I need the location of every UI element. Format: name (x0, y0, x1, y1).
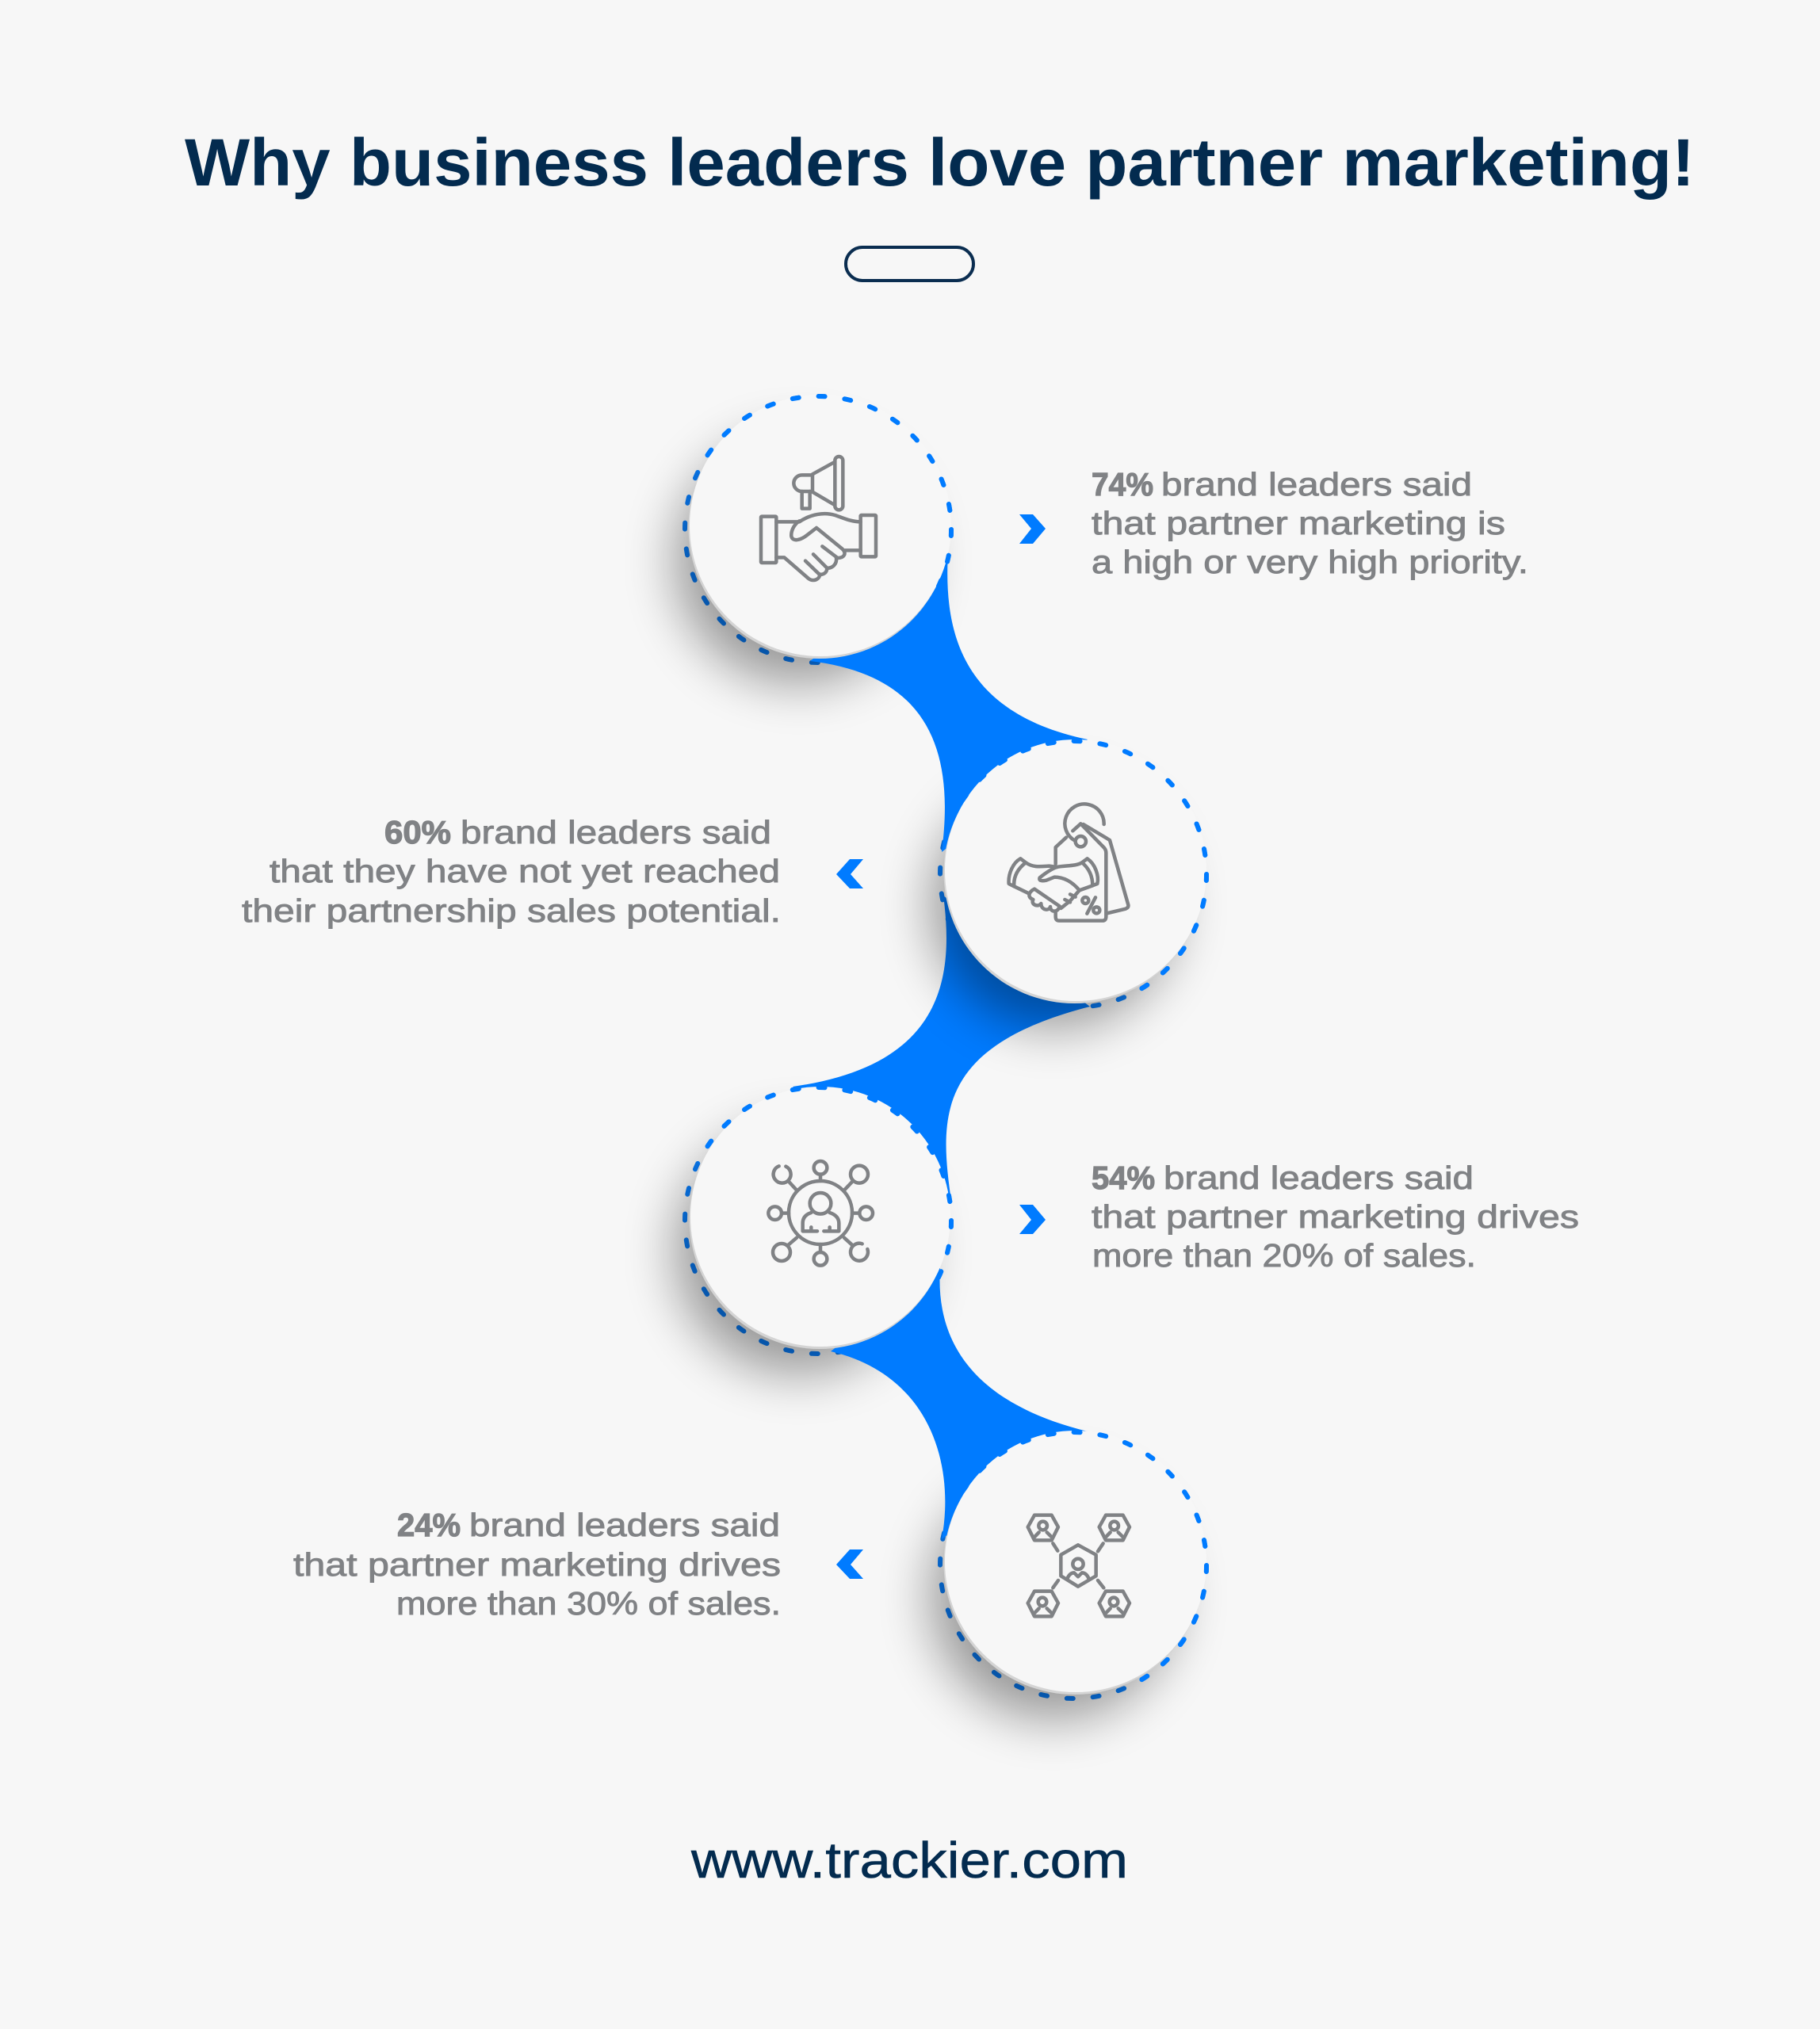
shadows of circles 1, 3, 4 (675, 438, 1176, 1719)
circle 1 disc (690, 395, 951, 656)
arrow: step 4 (836, 1549, 863, 1579)
icon: person network (768, 1161, 873, 1266)
title: Why business leaders love partner marketing! (185, 125, 1695, 200)
arrow: step 3 (1019, 1205, 1046, 1234)
footer url: www.trackier.com (690, 1832, 1128, 1889)
text block: 74%: that partner marketing is (1092, 505, 1505, 541)
text block: 74%: 74% (1092, 466, 1153, 502)
connector: circle 3 to circle 4 (831, 1268, 1088, 1539)
text block: 74%: brand leaders said (1161, 466, 1472, 502)
text block: 60%: that they have not yet reached (270, 853, 780, 889)
text block: 24% (293, 1507, 781, 1622)
text block: 54% (1092, 1160, 1579, 1274)
connector: circle 1 to circle 2 (810, 553, 1088, 852)
dashed ring upper-right overlay (685, 396, 1206, 1698)
circle 2 disc (945, 739, 1206, 1001)
text block: 24%: 24% (397, 1507, 461, 1543)
shadow of circle 2 (931, 782, 1176, 1028)
text block: 54%: brand leaders said (1164, 1160, 1474, 1196)
arrow: step 2 (836, 859, 863, 888)
circle 4 disc (945, 1431, 1206, 1692)
text block: 24%: that partner marketing drives (293, 1546, 781, 1583)
icon: megaphone and handshake (761, 457, 876, 580)
text block: 60% (242, 814, 781, 929)
dashed rings (685, 396, 1206, 1698)
text block: 24%: brand leaders said (469, 1507, 780, 1543)
icon: hexagon network (1028, 1515, 1130, 1616)
title pill decoration (846, 247, 973, 281)
text block: 60%: brand leaders said (461, 814, 771, 850)
text block: 74% (1092, 466, 1528, 580)
text block: 60%: 60% (384, 814, 451, 850)
text block: 24%: more than 30% of sales. (396, 1585, 781, 1622)
circle 3 disc (690, 1087, 950, 1347)
text block: 60%: their partnership sales potential. (242, 892, 781, 929)
text block: 54%: that partner marketing drives (1092, 1198, 1579, 1235)
text block: 74%: a high or very high priority. (1092, 544, 1528, 580)
arrow: step 1 (1019, 514, 1046, 544)
icon: handshake with price tag (1009, 804, 1128, 921)
text block: 54%: more than 20% of sales. (1092, 1237, 1476, 1274)
connector: circle 2 to circle 3 (793, 896, 1090, 1201)
disc rims (688, 397, 1205, 1695)
text block: 54%: 54% (1092, 1160, 1155, 1196)
